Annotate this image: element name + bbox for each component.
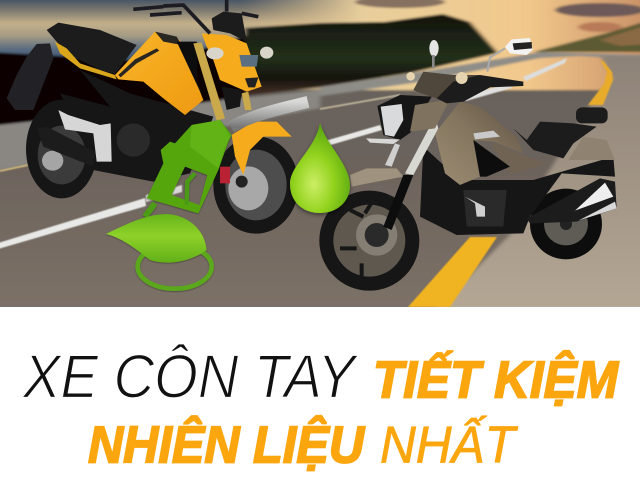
- silver fuel hose: [231, 102, 308, 127]
- left mirror: [429, 40, 439, 68]
- right mirror: [487, 38, 533, 72]
- rear wheel: [26, 100, 97, 198]
- road markings: [0, 58, 613, 307]
- left dark hillside: [0, 14, 498, 127]
- near shoulder band: [0, 90, 320, 172]
- rear fender: [7, 43, 53, 110]
- leaf and ring icon: [106, 214, 212, 289]
- shoulder on the right: [435, 56, 640, 310]
- title line 2: [88, 416, 518, 474]
- tank: [435, 102, 523, 185]
- background: road scene at sunset: [0, 0, 640, 320]
- right hill: [533, 20, 640, 52]
- title line 2: NHIÊN LIỆU: [88, 416, 365, 474]
- handlebar: [133, 0, 258, 33]
- yellow headlight cowl: [202, 12, 273, 92]
- fuel nozzle icon: [145, 120, 232, 217]
- hose link: [145, 203, 155, 217]
- frame and engine: [420, 147, 615, 235]
- title line 2: NHẤT: [380, 416, 518, 474]
- yellow front fender: [232, 122, 292, 175]
- oil drop icon: [290, 123, 350, 213]
- brown motorcycle: [319, 38, 617, 291]
- front wheel: [319, 191, 419, 291]
- yellow tail stripe: [55, 42, 117, 79]
- yellow tank: [115, 32, 203, 115]
- title: [21, 342, 620, 474]
- far road edge: [320, 52, 640, 96]
- nozzle trigger: [187, 173, 195, 205]
- bottom white panel: [0, 307, 640, 480]
- frame and engine: [37, 70, 213, 182]
- front fork: [193, 43, 225, 121]
- front fender: [350, 168, 403, 187]
- backrest: [576, 107, 608, 123]
- headlight: [366, 95, 450, 144]
- yellow motorcycle: [7, 0, 299, 234]
- front fork: [383, 175, 413, 230]
- title line 1: [21, 342, 620, 410]
- nozzle highlight: [190, 120, 230, 168]
- title line 1: XE CÔN TAY: [21, 342, 359, 410]
- sky: [0, 0, 640, 90]
- seat: [47, 23, 137, 74]
- title line 1: TIẾT KIỆM: [373, 350, 620, 410]
- rear cowl: [568, 137, 615, 160]
- rear wheel: [530, 189, 602, 259]
- nozzle body: [147, 120, 232, 213]
- leaf: [106, 214, 207, 263]
- windscreen and bars: [406, 72, 523, 103]
- front wheel: [213, 136, 299, 234]
- exhaust: [527, 178, 617, 223]
- side panel: [490, 142, 547, 175]
- ring: [138, 245, 212, 289]
- seat: [513, 122, 597, 158]
